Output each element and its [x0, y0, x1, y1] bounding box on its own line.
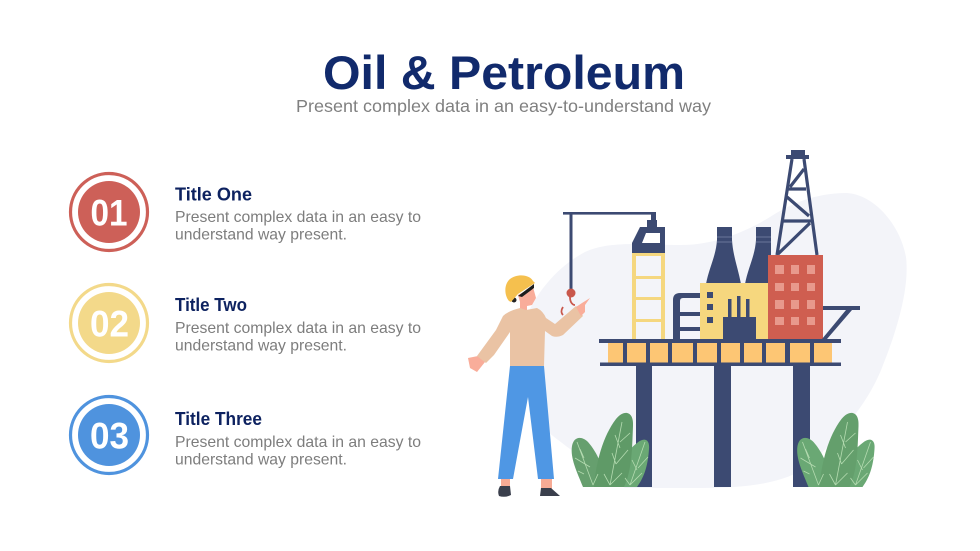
illustration: oil rig and worker — [468, 150, 907, 497]
body text 3: understand way present. — [175, 452, 347, 468]
left plant — [572, 413, 649, 487]
trousers — [498, 366, 554, 479]
shoes — [498, 486, 560, 497]
ankles — [501, 478, 552, 489]
list item 1 — [70, 174, 421, 250]
body text 1: Present complex data in an easy to — [175, 209, 421, 226]
derrick tower — [777, 150, 817, 255]
right plant — [797, 413, 875, 487]
hair — [512, 298, 516, 302]
crane — [562, 212, 665, 339]
badge 03: 03 — [90, 416, 129, 456]
neck and face — [518, 287, 536, 311]
right hand — [576, 298, 590, 316]
chimneys — [706, 227, 771, 284]
heading: Title Two: Title Two — [175, 295, 247, 315]
list item 3 — [70, 396, 421, 474]
badge 01: 01 — [90, 192, 128, 234]
badge 03 — [70, 396, 148, 474]
torso and arms — [477, 306, 583, 366]
red building — [768, 255, 823, 339]
side strut — [822, 306, 860, 339]
rig legs — [636, 364, 810, 487]
heading: Title Three: Title Three — [175, 409, 262, 429]
platform deck — [599, 339, 841, 366]
pipework — [673, 293, 701, 339]
heading: Title One: Title One — [175, 184, 252, 204]
body text 2: Present complex data in an easy to — [175, 320, 421, 337]
list item 2 — [70, 284, 421, 362]
body text 1: understand way present. — [175, 226, 347, 244]
badge 02: 02 — [90, 304, 129, 344]
yellow building — [700, 283, 768, 339]
title: Oil & Petroleum — [323, 46, 685, 99]
badge 02 — [70, 284, 148, 362]
worker — [468, 275, 590, 497]
body text 3: Present complex data in an easy to — [175, 434, 421, 451]
background blob — [524, 193, 907, 488]
body text 2: understand way present. — [175, 338, 347, 354]
left hand — [468, 356, 485, 372]
hard hat — [505, 275, 535, 302]
subtitle: Present complex data in an easy-to-understand way — [296, 96, 711, 116]
badge 01 — [70, 174, 148, 250]
